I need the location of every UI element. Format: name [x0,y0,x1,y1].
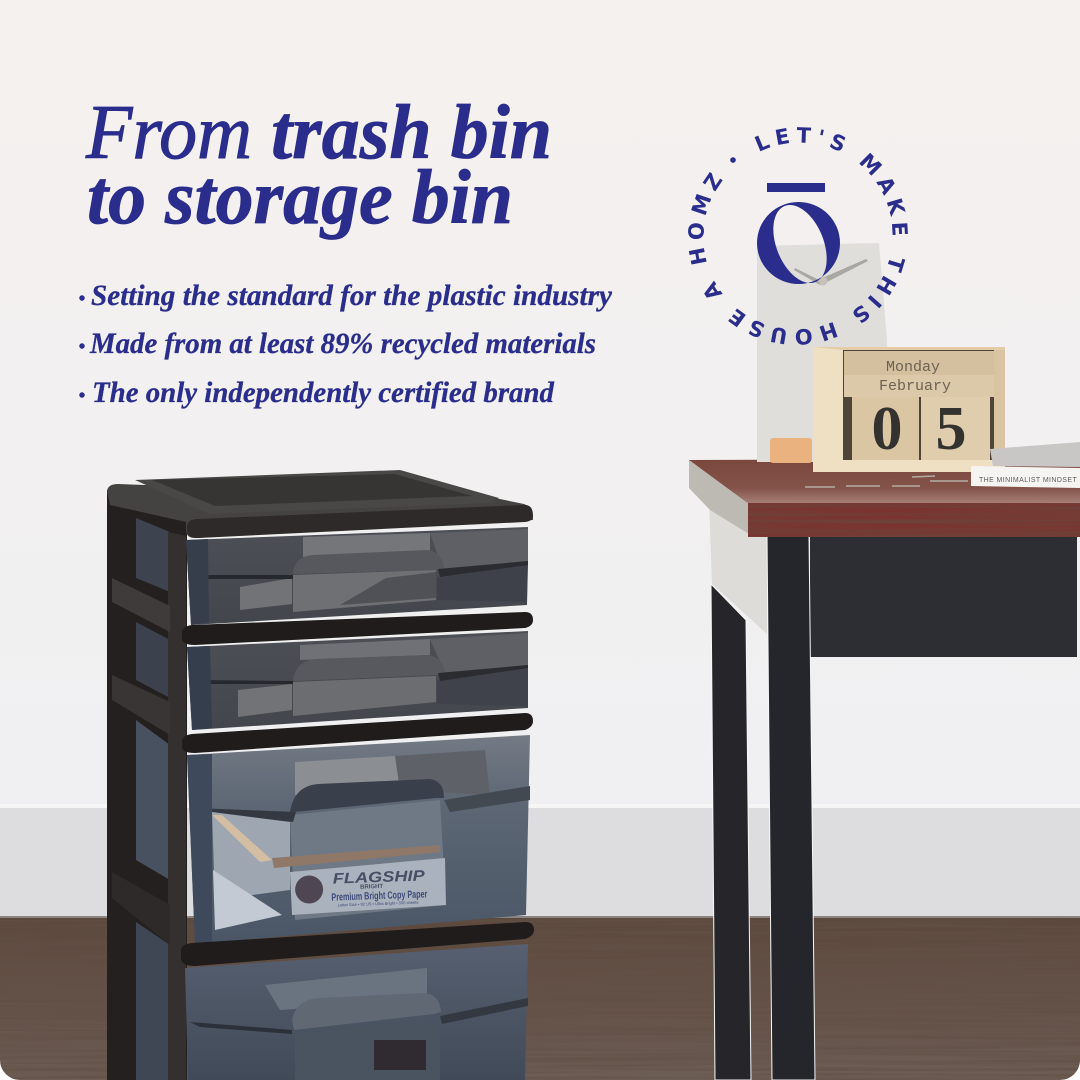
wall background [0,0,1080,808]
date digits [852,395,990,463]
date digits: 5 [936,395,966,463]
logo letter o with macron [757,183,840,284]
back leg [711,584,751,1080]
brand badge [688,127,908,345]
table top [689,459,1080,504]
box label printed on paper: Letter Size • 92 US • Ultra Bright • 500 sheets [338,900,418,907]
headline: to storage bin [87,154,513,240]
box label printed on paper: BRIGHT [360,884,384,891]
bullet list [79,279,613,409]
clock on table [757,243,887,463]
dark apron [810,535,1077,657]
rim 3 [182,713,533,753]
month and weekday blocks: Monday [886,359,940,376]
box label printed on paper [294,867,428,909]
metal side edge [689,460,749,534]
books [971,442,1080,488]
rim 2 [182,612,533,645]
wooden block calendar [813,347,1005,472]
wood floor [0,918,1080,1080]
metal apron [709,500,767,634]
top tray [135,470,499,514]
box label printed on paper: Premium Bright Copy Paper [331,888,428,904]
front leg [767,534,815,1080]
top rim [107,484,533,538]
month and weekday blocks [844,351,994,397]
circular slogan: LET'S MAKE THIS HOUSE A HOMZ [688,127,908,345]
drawer 4 [185,944,528,1080]
drawer 2 [187,631,528,730]
month and weekday blocks: February [879,378,951,395]
rim 4 [181,922,534,966]
bullet 3: The only independently certified brand [92,376,555,409]
box label printed on paper: FLAGSHIP [332,867,426,888]
side table [689,459,1080,1080]
books: THE MINIMALIST MINDSET [979,477,1077,484]
bullet 1: Setting the standard for the plastic industry [91,279,613,312]
paper clips [805,476,968,487]
drawer 3 [187,735,530,944]
plastic drawer tower [107,470,534,1080]
date digits: 0 [872,395,902,463]
headline [85,89,552,240]
bullet 2: Made from at least 89% recycled materials [89,327,596,360]
mahogany front edge [748,503,1080,537]
baseboard [0,804,1080,919]
headline: From trash bin [85,89,552,175]
left side frame [107,490,187,1080]
drawer 1 [186,527,528,625]
